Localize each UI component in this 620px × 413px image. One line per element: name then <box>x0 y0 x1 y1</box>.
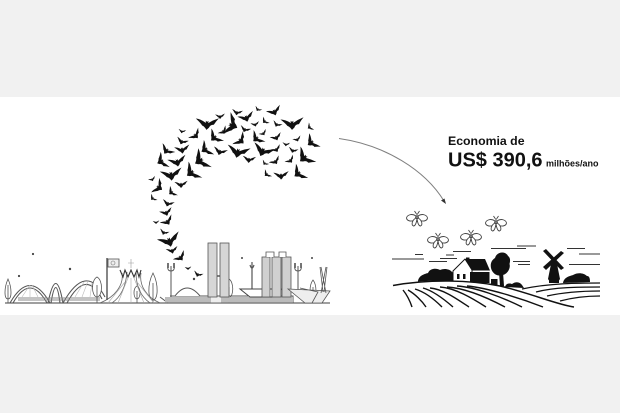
sky streaks <box>392 246 600 264</box>
farmhouse <box>453 258 490 283</box>
pantheon sculpture <box>288 267 330 303</box>
cathedral with flag <box>100 258 160 303</box>
hedges <box>418 269 590 288</box>
ground line <box>5 302 330 304</box>
ministry buildings <box>262 252 291 297</box>
trees <box>5 273 316 303</box>
senate bowl <box>240 289 282 297</box>
tree <box>491 252 510 286</box>
windmill <box>543 249 564 283</box>
congress platform and dome <box>160 288 293 303</box>
moths <box>406 211 506 248</box>
savings headline: milhões/ano <box>546 158 599 168</box>
field hills <box>522 283 600 315</box>
curved arrow <box>339 138 446 204</box>
Brasília skyline illustration <box>5 243 330 303</box>
bridge arches <box>10 281 105 303</box>
savings headline: Economia de <box>448 134 525 148</box>
street lamps <box>168 262 301 297</box>
farm landscape <box>392 246 600 315</box>
stars <box>18 253 313 280</box>
white band background <box>0 97 620 315</box>
congress twin towers <box>208 243 229 297</box>
crop rows <box>403 286 543 307</box>
bat swarm <box>148 105 321 279</box>
savings headline: US$ 390,6 <box>448 150 543 172</box>
savings headline <box>448 134 599 172</box>
